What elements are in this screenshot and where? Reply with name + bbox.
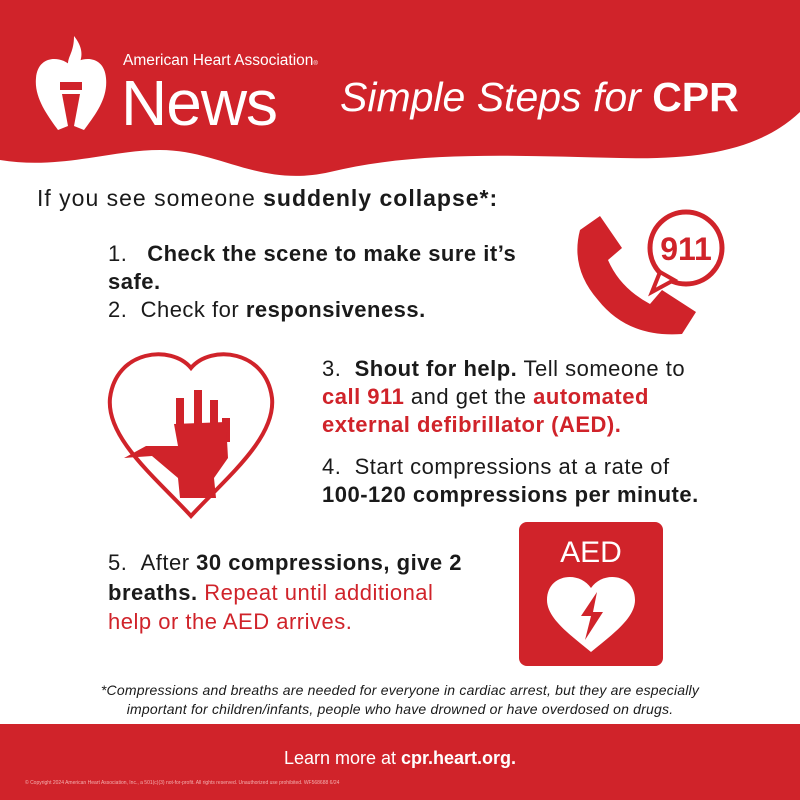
steps 1-2 — [108, 241, 516, 322]
text: 100-120 compressions per minute. — [322, 482, 699, 507]
steps 1-2: safe. — [108, 269, 161, 294]
logo text: American Heart Association: American Heart Association® — [123, 52, 318, 69]
text: 4. Start compressions at a rate of — [322, 454, 670, 479]
icon: AED box: AED — [560, 536, 622, 569]
step 5: 5. After 30 compressions, give 2 — [108, 550, 462, 575]
title: Simple Steps for CPR — [340, 74, 739, 120]
footnote: important for children/infants, people who have drowned or have overdosed on drugs. — [127, 701, 673, 717]
icon: heart with hands — [108, 352, 274, 519]
header banner — [0, 0, 800, 176]
icon: phone 911 — [577, 210, 724, 334]
footnote — [101, 682, 700, 717]
step 5: help or the AED arrives. — [108, 609, 352, 634]
footnote: *Compressions and breaths are needed for everyone in cardiac arrest, but they are especially — [101, 682, 699, 698]
logo: heart torch — [36, 36, 106, 130]
icon: phone 911: 911 — [660, 231, 712, 267]
steps 3-4: call 911 and get the automated — [322, 384, 649, 409]
steps 3-4: external defibrillator (AED). — [322, 412, 621, 437]
steps 1-2: 1. Check the scene to make sure it’s — [108, 241, 516, 266]
steps 3-4 — [322, 356, 685, 437]
logo text: News: News — [121, 67, 277, 139]
steps 3-4: 3. Shout for help. Tell someone to — [322, 356, 685, 381]
footer link: Learn more at cpr.heart.org. — [284, 748, 516, 768]
copyright: © Copyright 2024 American Heart Association, Inc., a 501(c)(3) not-for-profit. All rights reserved. Unauthorized use prohibited. WF568688 6/24 — [25, 780, 339, 786]
steps 1-2: 2. Check for responsiveness. — [108, 297, 426, 322]
icon: AED box — [519, 522, 663, 666]
intro text: If you see someone suddenly collapse*: — [37, 185, 498, 211]
footer — [0, 724, 800, 800]
step 5 — [108, 550, 462, 634]
step 5: breaths. Repeat until additional — [108, 580, 433, 604]
